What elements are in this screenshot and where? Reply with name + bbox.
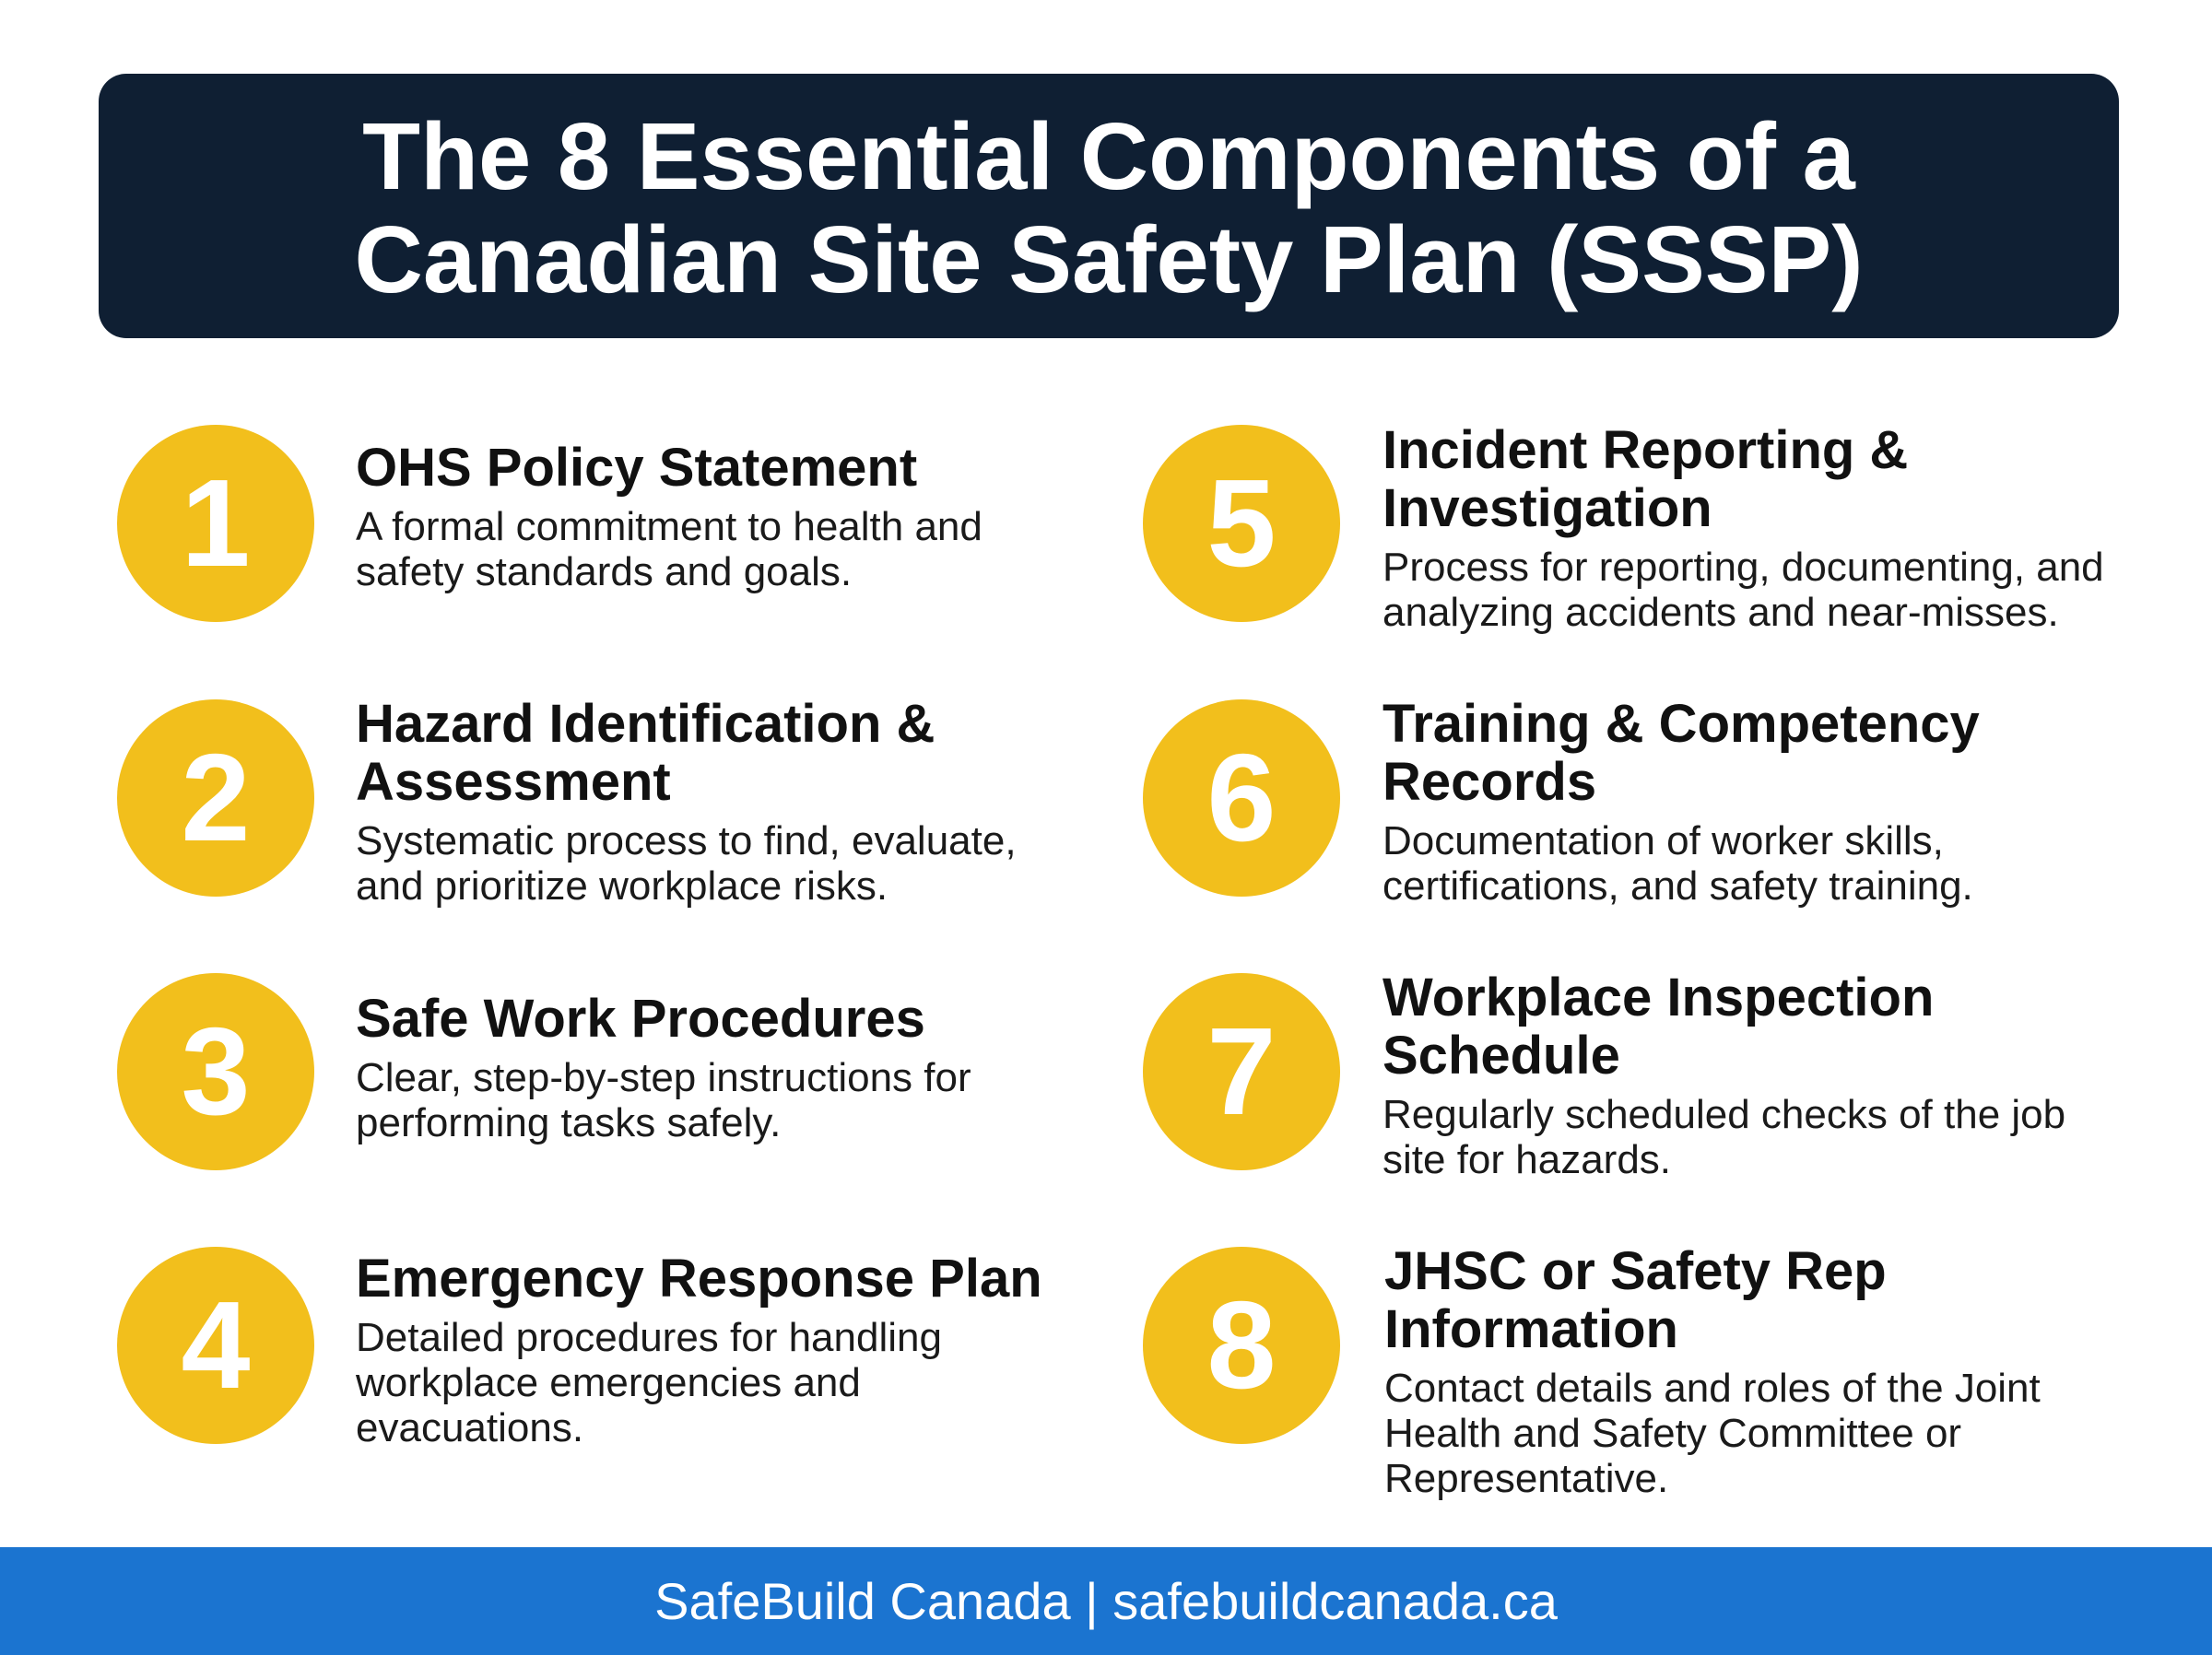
item 5: Investigation	[1382, 478, 1712, 538]
title: The 8 Essential Components of a	[362, 103, 1855, 209]
item 6: Records	[1382, 752, 1596, 812]
circle 6: 6	[1206, 728, 1277, 867]
item 4: Emergency Response Plan	[356, 1249, 1042, 1309]
item 3	[356, 989, 971, 1145]
item 6: Documentation of worker skills,	[1382, 818, 1944, 863]
item 3: Clear, step-by-step instructions for	[356, 1055, 971, 1100]
item 1: OHS Policy Statement	[356, 438, 917, 498]
circle 2: 2	[181, 728, 251, 867]
circle 8: 8	[1206, 1275, 1277, 1414]
circle 7	[1143, 973, 1340, 1170]
item 5: Incident Reporting &	[1382, 420, 1908, 480]
title: Canadian Site Safety Plan (SSSP)	[354, 206, 1864, 312]
item 1	[356, 438, 982, 594]
item 8: Representative.	[1384, 1456, 1668, 1501]
item 7: Regularly scheduled checks of the job	[1382, 1092, 2065, 1137]
circle 3	[117, 973, 314, 1170]
circle 1: 1	[181, 453, 251, 593]
item 4: evacuations.	[356, 1405, 583, 1450]
item 2: Assessment	[356, 752, 671, 812]
circle 1	[117, 425, 314, 622]
item 3: performing tasks safely.	[356, 1100, 781, 1145]
item 6: certifications, and safety training.	[1382, 863, 1973, 909]
title	[99, 74, 2119, 338]
item 7: site for hazards.	[1382, 1137, 1671, 1182]
item 5	[1382, 420, 2104, 635]
item 2: and prioritize workplace risks.	[356, 863, 888, 909]
item 8: Information	[1384, 1299, 1678, 1359]
item 6	[1382, 694, 1980, 909]
item 4: Detailed procedures for handling	[356, 1315, 942, 1360]
circle 3: 3	[181, 1002, 251, 1141]
circle 4: 4	[181, 1275, 251, 1414]
item 2: Systematic process to find, evaluate,	[356, 818, 1017, 863]
item 1: safety standards and goals.	[356, 549, 852, 594]
item 1: A formal commitment to health and	[356, 504, 982, 549]
item 2	[356, 694, 1017, 909]
circle 7: 7	[1206, 1002, 1277, 1141]
item 8: Contact details and roles of the Joint	[1384, 1366, 2041, 1411]
item 6: Training & Competency	[1382, 694, 1980, 754]
item 7	[1382, 968, 2065, 1182]
item 7: Schedule	[1382, 1026, 1620, 1086]
circle 5: 5	[1206, 453, 1277, 593]
item 4: workplace emergencies and	[356, 1360, 861, 1405]
footer	[0, 1547, 2212, 1655]
item 4	[356, 1249, 1042, 1450]
circle 4	[117, 1247, 314, 1444]
item 8: JHSC or Safety Rep	[1384, 1241, 1887, 1301]
item 3: Safe Work Procedures	[356, 989, 925, 1049]
item 5: Process for reporting, documenting, and	[1382, 545, 2104, 590]
circle 8	[1143, 1247, 1340, 1444]
item 8: Health and Safety Committee or	[1384, 1411, 1961, 1456]
circle 5	[1143, 425, 1340, 622]
circle 2	[117, 699, 314, 897]
item 7: Workplace Inspection	[1382, 968, 1934, 1027]
item 8	[1384, 1241, 2041, 1501]
item 2: Hazard Identification &	[356, 694, 935, 754]
item 5: analyzing accidents and near-misses.	[1382, 590, 2059, 635]
circle 6	[1143, 699, 1340, 897]
footer: SafeBuild Canada | safebuildcanada.ca	[654, 1572, 1558, 1630]
